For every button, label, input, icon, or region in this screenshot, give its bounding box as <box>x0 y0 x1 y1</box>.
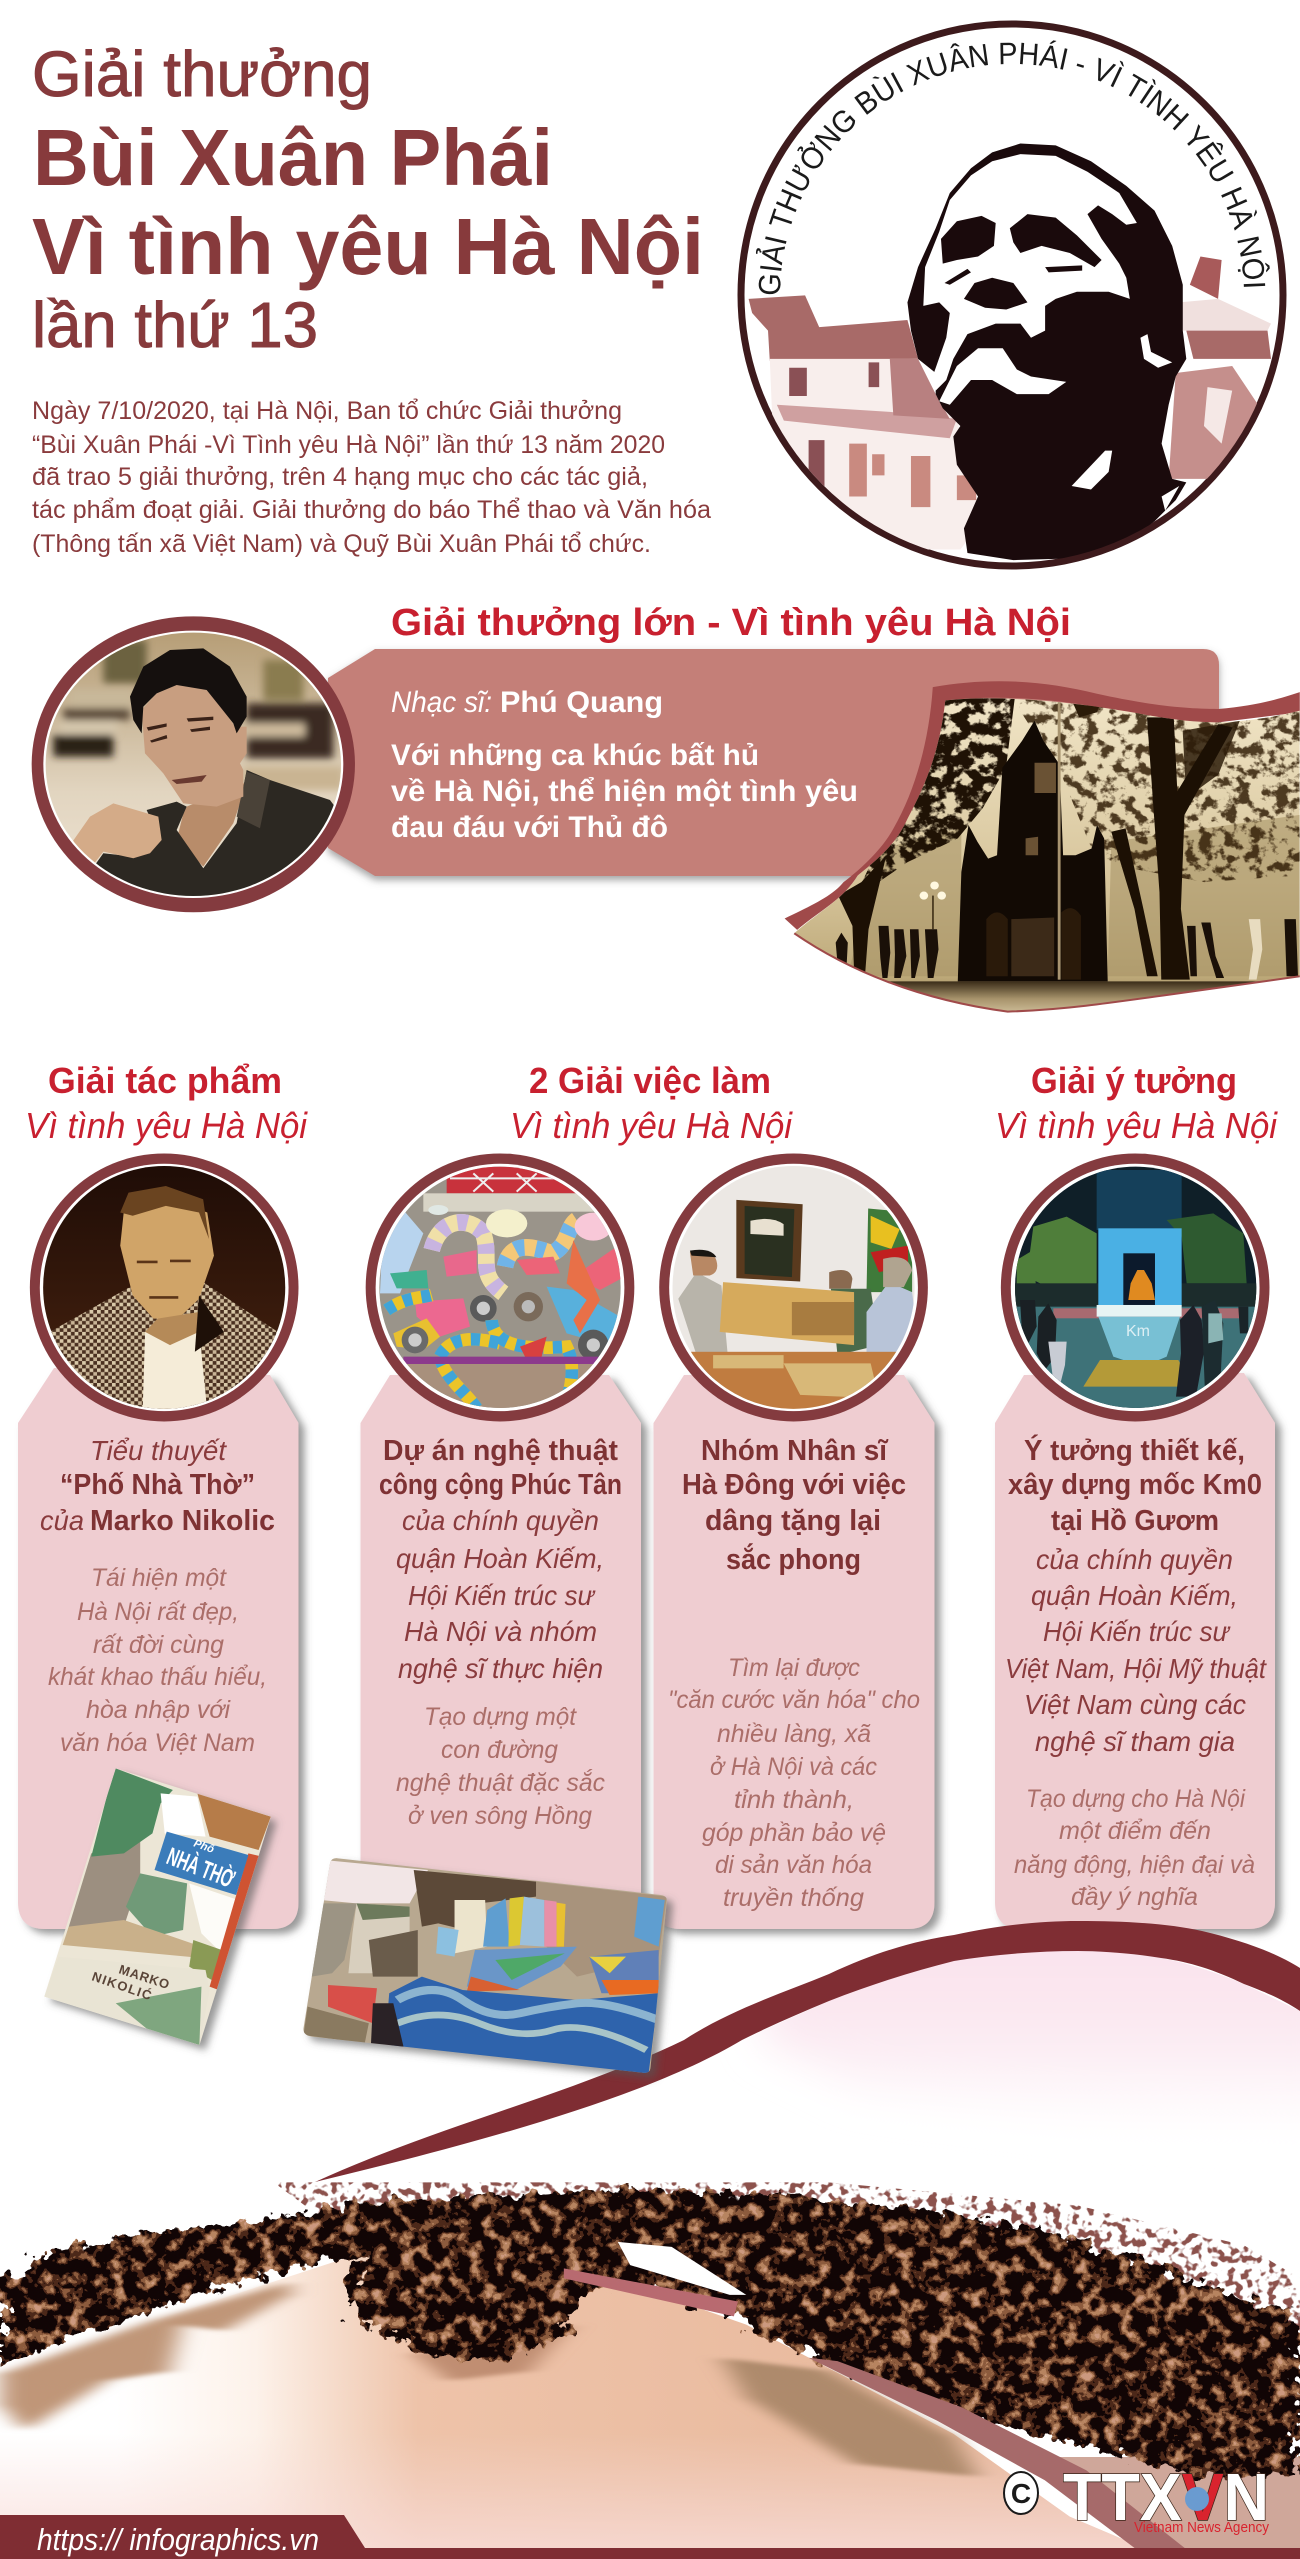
copyright and TTXVN logo: C <box>1011 2478 1031 2509</box>
panel 1 title: “Phố Nhà Thờ” <box>60 1469 255 1501</box>
panel 4 title: Ý tưởng thiết kế, <box>1024 1433 1245 1467</box>
panel 2: Phúc Tân public art <box>360 1375 641 1929</box>
lakeside road <box>808 2358 1194 2555</box>
panel 2 title: của chính quyền <box>402 1505 599 1536</box>
logo houses <box>749 257 1271 550</box>
panel 1 description: văn hóa Việt Nam <box>60 1729 255 1757</box>
panel 3: Hà Đông group <box>654 1375 934 1929</box>
logo: Bùi Xuân Phái portrait badge <box>738 20 1286 570</box>
panel 4 title: của chính quyền <box>1036 1544 1233 1575</box>
photo: royal decree scroll <box>659 1153 928 1421</box>
panel 4 title: tại Hồ Gươm <box>1051 1505 1219 1537</box>
panel 1 description: rất đời cùng <box>93 1631 224 1659</box>
logo face <box>907 144 1186 560</box>
photo: Km0 milestone render: Km <box>1126 1323 1150 1340</box>
panel 3 description: di sản văn hóa <box>715 1851 872 1879</box>
panel 4 description: đầy ý nghĩa <box>1071 1883 1198 1911</box>
panel 4 title <box>1005 1433 1267 1757</box>
copyright and TTXVN logo: TTXVN <box>1063 2460 1269 2535</box>
panel 2 title: công cộng Phúc Tân <box>379 1469 622 1501</box>
intro paragraph: (Thông tấn xã Việt Nam) và Quỹ Bùi Xuân Phái tổ chức. <box>32 530 651 558</box>
panel 3 description: truyền thống <box>723 1884 864 1912</box>
panel 4 title: Việt Nam cùng các <box>1024 1689 1246 1720</box>
grand prize text <box>391 686 858 844</box>
panel 1 description: Hà Nội rất đẹp, <box>77 1598 239 1626</box>
panel 4 description: một điểm đến <box>1059 1817 1211 1845</box>
lamp <box>920 881 946 929</box>
title: Bùi Xuân Phái <box>33 113 553 202</box>
distant haze trees <box>847 815 1300 976</box>
intro paragraph: “Bùi Xuân Phái -Vì Tình yêu Hà Nội” lần thứ 13 năm 2020 <box>32 431 665 459</box>
portrait: Phú Quang <box>32 616 355 915</box>
grand prize text: đau đáu với Thủ đô <box>391 811 668 844</box>
photo frame wave <box>785 681 1300 930</box>
church tower <box>958 721 1108 981</box>
panel 2 title: quận Hoàn Kiếm, <box>396 1543 604 1574</box>
heading: work prize <box>25 1060 308 1146</box>
panel 2 title <box>379 1435 622 1684</box>
panel 4 description <box>1014 1785 1255 1911</box>
portrait: Marko Nikolic <box>30 1153 299 1421</box>
tree foliage <box>862 698 1300 882</box>
grand prize panel <box>328 649 1219 876</box>
heading: idea prize <box>995 1060 1278 1146</box>
heading: deeds prize: 2 Giải việc làm <box>529 1060 771 1101</box>
panel 3 description: tỉnh thành, <box>734 1786 854 1814</box>
panel 2 title: Hội Kiến trúc sư <box>408 1580 596 1611</box>
panel 3 description: nhiều làng, xã <box>717 1720 871 1748</box>
book cover text: MARKO <box>117 1962 171 1992</box>
book cover text <box>90 1838 239 2003</box>
photo: Hanoi church tower <box>776 681 1300 1017</box>
panel 1 title: của <box>40 1505 84 1536</box>
panel 4 description: Tạo dựng cho Hà Nội <box>1026 1785 1246 1813</box>
panel 3 description <box>668 1654 920 1912</box>
panel 3 description: ở Hà Nội và các <box>710 1753 877 1781</box>
copyright and TTXVN logo: Vietnam News Agency <box>1134 2519 1269 2536</box>
photo bottom edge <box>794 933 1300 1012</box>
panel 2 title: Dự án nghệ thuật <box>383 1435 618 1467</box>
panel 4 title: Việt Nam, Hội Mỹ thuật <box>1005 1653 1267 1684</box>
bright patch <box>618 2242 746 2295</box>
panel 2 title: nghệ sĩ thực hiện <box>398 1653 603 1684</box>
lake aerial scene <box>0 2182 1300 2555</box>
panel 1 description: Tái hiện một <box>91 1564 227 1592</box>
people <box>836 919 1298 980</box>
grand prize text: Với những ca khúc bất hủ <box>391 739 759 772</box>
panel 4: Km0 idea <box>995 1373 1275 1929</box>
panel 2 description: nghệ thuật đặc sắc <box>396 1768 605 1797</box>
intro paragraph: Ngày 7/10/2020, tại Hà Nội, Ban tổ chức Giải thưởng <box>32 397 622 425</box>
book cover text: NHÀ THỜ <box>163 1841 239 1894</box>
panel 3 title <box>682 1435 906 1576</box>
intro paragraph: đã trao 5 giải thưởng, trên 4 hạng mục cho các tác giả, <box>32 463 648 491</box>
panel 3 description: "căn cước văn hóa" cho <box>668 1686 920 1714</box>
panel 4 title: xây dựng mốc Km0 <box>1008 1469 1262 1501</box>
intro paragraph: tác phẩm đoạt giải. Giải thưởng do báo Thể thao và Văn hóa <box>32 496 711 524</box>
grand prize text: về Hà Nội, thể hiện một tình yêu <box>391 775 858 808</box>
heading: work prize: Giải tác phẩm <box>48 1060 282 1101</box>
title <box>32 38 704 361</box>
panel 4 title: Hội Kiến trúc sư <box>1043 1616 1231 1647</box>
panel 1 description: hòa nhập với <box>86 1696 231 1724</box>
swoosh <box>315 1921 1300 2182</box>
panel 1 description: khát khao thấu hiểu, <box>48 1663 267 1691</box>
heading: idea prize: Vì tình yêu Hà Nội <box>995 1105 1278 1146</box>
section headings <box>25 1060 1278 1146</box>
grand prize text: Phú Quang <box>500 686 663 719</box>
panel 4 title: quận Hoàn Kiếm, <box>1031 1580 1238 1611</box>
blurred background <box>53 640 343 790</box>
road <box>889 981 1258 1011</box>
photo: bottle dragon art <box>299 1855 671 2075</box>
panel 3 title: Nhóm Nhân sĩ <box>701 1435 889 1467</box>
heading: idea prize: Giải ý tưởng <box>1031 1060 1237 1101</box>
footer bar <box>0 2515 1300 2559</box>
panel 2 title: Hà Nội và nhóm <box>404 1616 597 1647</box>
bridge <box>564 2268 738 2316</box>
panel 2 description: Tạo dựng một <box>424 1703 577 1731</box>
panel 3 title: dâng tặng lại <box>705 1505 881 1537</box>
panel 4 description: năng động, hiện đại và <box>1014 1851 1255 1879</box>
grand prize heading: Giải thưởng lớn - Vì tình yêu Hà Nội <box>391 602 1071 644</box>
footer url: https:// infographics.vn <box>37 2522 319 2557</box>
sparse rooftops fringe <box>274 2182 1300 2338</box>
grand prize text: Nhạc sĩ: <box>391 686 492 719</box>
tree trunks <box>838 717 1233 980</box>
panel 2 description: con đường <box>441 1736 558 1764</box>
panel 3 description: Tìm lại được <box>728 1654 860 1682</box>
book cover text: Phố <box>192 1838 217 1856</box>
book: Phố Nhà Thờ <box>42 1767 275 2047</box>
heading: work prize: Vì tình yêu Hà Nội <box>25 1105 308 1146</box>
panel 3 description: góp phần bảo vệ <box>702 1819 886 1847</box>
panel 4 title: nghệ sĩ tham gia <box>1035 1726 1235 1757</box>
lake water <box>0 2252 1161 2555</box>
photo: Phúc Tân mural <box>379 1166 621 1408</box>
panel 3 title: Hà Đông với việc <box>682 1469 906 1501</box>
heading: deeds prize <box>510 1060 793 1146</box>
panel 1: novel <box>18 1368 298 1929</box>
heading: deeds prize: Vì tình yêu Hà Nội <box>510 1105 793 1146</box>
shore under logo <box>1053 2457 1300 2555</box>
logo curved text: GIẢI THƯỞNG BÙI XUÂN PHÁI - VÌ TÌNH YÊU HÀ NỘI <box>756 40 1270 294</box>
intro paragraph <box>32 397 711 558</box>
photo: Km0 milestone render <box>1010 1163 1263 1417</box>
panel 1 title: Marko Nikolic <box>90 1505 275 1537</box>
ring: mural photo <box>366 1153 634 1421</box>
ring: Km0 photo <box>1001 1153 1270 1421</box>
panel 1 title <box>40 1435 275 1537</box>
title: Vì tình yêu Hà Nội <box>32 202 704 291</box>
panel 1 title: Tiểu thuyết <box>90 1435 227 1466</box>
title: lần thứ 13 <box>32 289 318 361</box>
tree canopy <box>0 2189 1300 2477</box>
panel 3 title: sắc phong <box>726 1542 861 1576</box>
book cover text: NIKOLIĆ <box>90 1969 154 2003</box>
title: Giải thưởng <box>32 38 372 110</box>
panel 1 description <box>48 1564 267 1757</box>
bottom pink sky <box>762 1951 1300 2092</box>
panel 2 description <box>396 1703 605 1830</box>
panel 2 description: ở ven sông Hồng <box>408 1802 592 1830</box>
